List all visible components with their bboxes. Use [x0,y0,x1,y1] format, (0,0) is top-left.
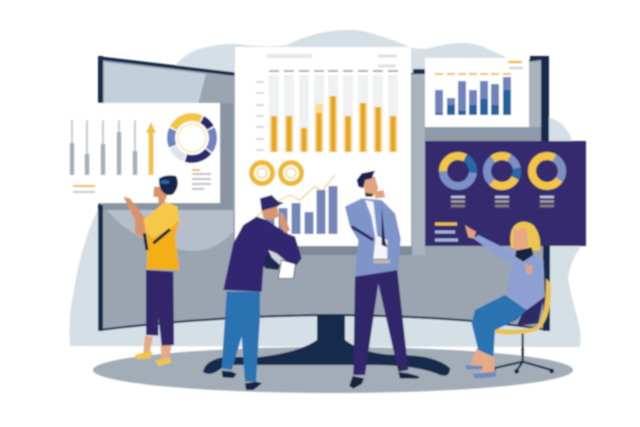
panel: left chart [66,103,220,203]
donut 3 [532,156,562,186]
panel background [425,141,586,246]
column tracks [274,75,393,152]
jacket [223,217,302,292]
column tops [269,70,398,72]
ring charts [252,162,302,184]
lower bars [270,186,333,234]
bar chart [72,120,156,175]
left panel shadow [103,103,233,210]
hair [159,175,178,195]
yellow legend mark [73,170,200,186]
chin hand [525,264,533,275]
shoes [465,365,496,379]
phone hand shadow [515,247,533,262]
person: woman in yellow jacket [123,175,179,366]
caption lines [435,232,458,240]
lower screen sheen [107,205,233,251]
trousers [472,295,527,357]
face [513,228,528,250]
legend lines [192,174,211,189]
shirt [365,200,387,259]
chair shell [495,278,551,334]
top right note [378,56,397,66]
panel: donut dashboard [425,141,586,246]
trend line [255,175,335,218]
jacket highlight [143,202,179,238]
floor ellipse [93,347,573,393]
monitor stand [203,315,450,376]
face and neck [153,187,167,203]
clipboard back [263,250,282,270]
hair [357,171,375,188]
hand [279,213,290,233]
person: standing man in suit [345,171,420,389]
legend marks [508,61,522,63]
caption lines [73,191,95,193]
torso [507,252,545,310]
top frame edge [99,58,234,74]
hair highlight [160,180,170,184]
bars [439,77,507,115]
main panel shadow [235,246,412,255]
jacket strap [144,229,170,250]
hand [375,190,385,198]
clipboard page [268,250,287,265]
donut 2 [487,156,517,186]
arm shadow [352,227,373,240]
head [363,177,378,197]
illustration [66,30,586,393]
bar tops [435,73,511,75]
chair back [517,292,545,326]
trousers [146,270,174,346]
legs [143,336,172,361]
bar highlights [439,90,507,115]
panel: top right chart [425,58,529,127]
face [262,206,278,220]
shoes [349,372,420,389]
column values [274,96,393,152]
column halo [274,96,393,152]
cap [260,195,284,211]
frame corner [413,69,425,74]
panel background [425,58,529,127]
tie [382,207,387,247]
trousers [222,292,260,382]
donut chart [171,117,213,159]
yellow caption [435,222,457,226]
panel: main chart [235,47,411,246]
shoes [222,371,262,390]
axis labels [256,82,264,150]
donut legends [451,197,554,206]
paper [278,260,295,278]
monitor screen [99,58,548,330]
belt [373,260,390,263]
legend note [509,67,523,69]
panel background [66,103,220,203]
frame strip between panels [412,74,425,255]
feet [470,348,495,373]
trousers [353,265,408,375]
shoes [135,352,171,366]
heading bar [267,54,312,58]
person: man with clipboard [222,195,302,390]
panel background [235,47,411,246]
background blob [70,30,581,347]
chair casters [492,367,554,374]
beard [365,193,373,197]
right frame edge [530,56,550,331]
pointing hand [465,225,476,239]
pointing arm [473,235,513,262]
person: seated woman [465,222,554,379]
arm [123,197,145,238]
jacket [143,202,179,270]
shadow under top right panel [425,127,541,141]
screen sheen [104,62,206,135]
right frame strip [529,62,541,141]
left frame edge [98,56,103,331]
chair base [493,333,552,371]
donut 1 [443,156,473,186]
hair [510,222,540,252]
suit [345,198,401,277]
monitor [98,56,550,376]
